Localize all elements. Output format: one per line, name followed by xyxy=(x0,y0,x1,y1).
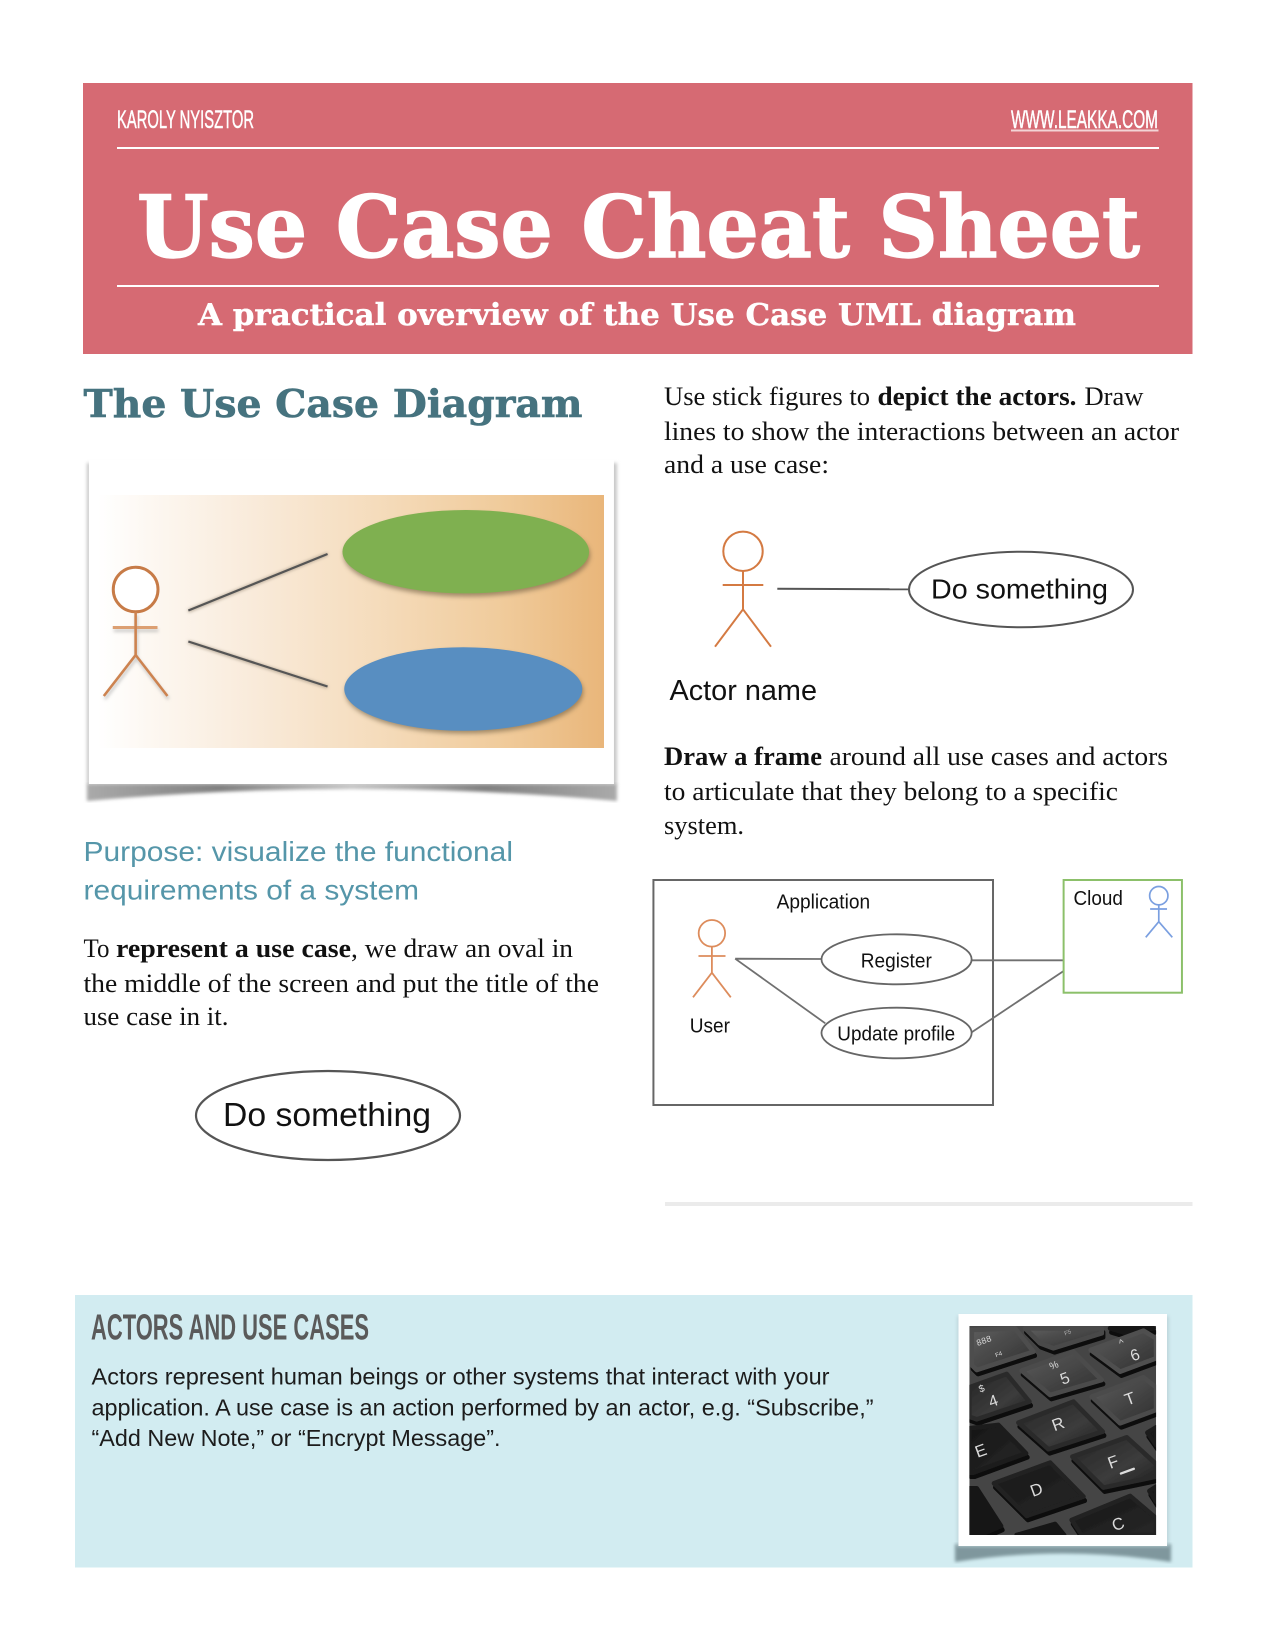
do something oval xyxy=(909,552,1133,627)
key labels: 888 xyxy=(975,1333,993,1348)
header banner xyxy=(83,83,1192,354)
text block: depict the actors: Use stick figures to xyxy=(664,382,870,411)
main title: Use Case Cheat Sheet xyxy=(137,178,1140,278)
actor name label: Actor name xyxy=(670,675,817,707)
register oval: Register xyxy=(861,950,932,972)
system frame diagram xyxy=(653,880,1182,1105)
text block: draw a frame xyxy=(664,742,1168,840)
use case oval example xyxy=(196,1071,460,1160)
text block: draw a frame: Draw a frame xyxy=(664,742,822,771)
blue use case oval xyxy=(344,647,583,734)
do something oval: Do something xyxy=(931,574,1108,605)
actor and use case diagram xyxy=(670,532,1133,707)
actor stick figure xyxy=(715,532,771,647)
key labels xyxy=(972,1329,1142,1535)
key labels: F4 xyxy=(995,1351,1004,1359)
text block: depict the actors: depict the actors. xyxy=(878,382,1076,411)
keyboard keys xyxy=(969,1328,1157,1539)
green use case oval xyxy=(342,510,590,596)
key labels: $ xyxy=(977,1383,987,1395)
text block: draw a frame: to articulate that they belong to a specific xyxy=(664,777,1118,806)
key labels: F5 xyxy=(1064,1329,1073,1337)
key labels: % xyxy=(1048,1359,1060,1373)
use case oval example: Do something xyxy=(223,1096,431,1133)
heading: the use case diagram: The Use Case Diagram xyxy=(84,382,582,427)
key labels: R xyxy=(1049,1413,1067,1435)
keyboard photo xyxy=(955,1314,1171,1562)
key labels: D xyxy=(1028,1479,1045,1501)
panel body text: application. A use case is an action performed by an actor, e.g. “Subscribe,” xyxy=(92,1394,874,1420)
purpose subheading xyxy=(84,836,513,906)
cloud actor xyxy=(1146,886,1172,937)
key labels: 6 xyxy=(1128,1346,1142,1365)
subtitle: A practical overview of the Use Case UML diagram xyxy=(197,298,1076,333)
photo curl shadow xyxy=(87,784,617,801)
key labels: ^ xyxy=(1118,1338,1126,1350)
purpose subheading: Purpose: visualize the functional xyxy=(84,836,513,867)
update profile oval xyxy=(821,1008,972,1058)
text block: draw a frame: system. xyxy=(664,811,744,840)
stick figure actor xyxy=(104,567,168,699)
user actor xyxy=(693,920,731,997)
key labels: F xyxy=(1105,1451,1121,1473)
text block: depict the actors: Draw xyxy=(1084,382,1144,411)
key labels: 4 xyxy=(986,1392,1001,1411)
text block: represent a use case: represent a use case xyxy=(116,934,351,963)
user label: User xyxy=(690,1015,730,1037)
text block: depict the actors: lines to show the interactions between an actor xyxy=(664,417,1179,446)
panel: actors and use cases xyxy=(75,1295,1192,1568)
text block: represent a use case: To xyxy=(84,934,110,963)
text block: represent a use case xyxy=(84,934,599,1031)
key labels: E xyxy=(972,1440,989,1462)
text block: depict the actors xyxy=(664,382,1179,479)
key labels: T xyxy=(1122,1388,1138,1409)
text block: depict the actors: and a use case: xyxy=(664,450,829,479)
website link: WWW.LEAKKA.COM xyxy=(1011,106,1158,134)
key labels: C xyxy=(1109,1513,1127,1535)
panel body text: “Add New Note,” or “Encrypt Message”. xyxy=(92,1425,500,1451)
panel heading: ACTORS AND USE CASES xyxy=(91,1306,369,1348)
photo shadow xyxy=(955,1544,1171,1562)
register oval xyxy=(821,934,972,984)
text block: draw a frame: around all use cases and actors xyxy=(830,742,1168,771)
purpose subheading: requirements of a system xyxy=(84,874,419,906)
panel body text xyxy=(92,1364,874,1451)
cloud frame: Cloud xyxy=(1074,888,1123,910)
application label: Application xyxy=(777,891,870,913)
connecting lines xyxy=(188,554,328,687)
author name: KAROLY NYISZTOR xyxy=(117,106,254,134)
key labels: 5 xyxy=(1058,1370,1072,1389)
text block: represent a use case: use case in it. xyxy=(84,1002,229,1031)
panel body text: Actors represent human beings or other systems that interact with your xyxy=(92,1364,830,1390)
application frame xyxy=(653,880,993,1105)
framed illustration: actor with two use cases xyxy=(87,460,617,801)
update profile oval: Update profile xyxy=(837,1024,955,1046)
text block: represent a use case: , we draw an oval in xyxy=(351,934,573,963)
text block: represent a use case: the middle of the screen and put the title of the xyxy=(84,969,599,998)
cloud frame xyxy=(1064,880,1182,993)
